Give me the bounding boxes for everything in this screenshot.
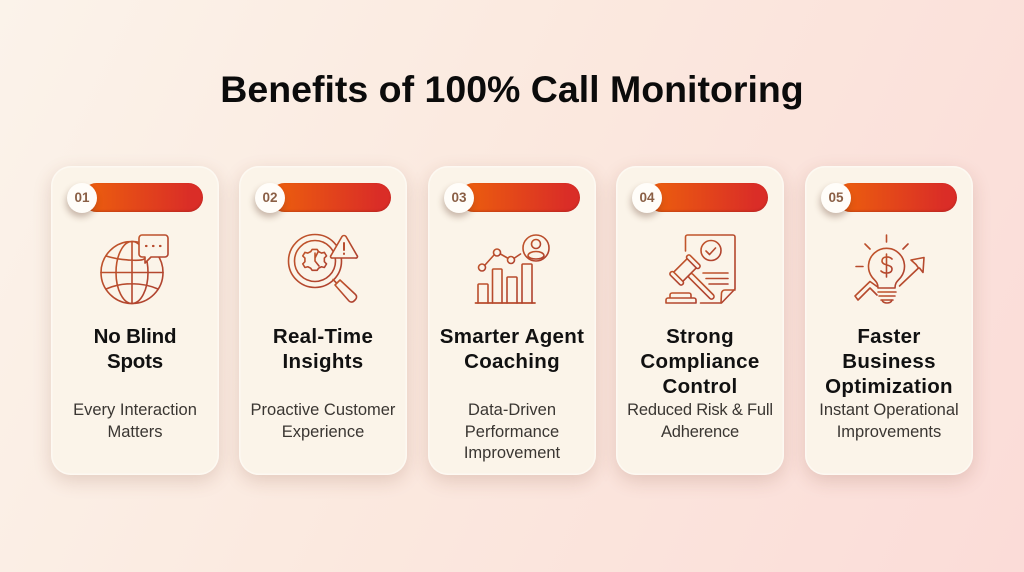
title: Benefits of 100% Call Monitoring [220,68,804,110]
card heading: No Blind [94,325,176,348]
card heading: Faster [857,325,921,348]
card heading: Compliance [640,350,760,373]
card heading: Spots [107,350,163,373]
panel: card 2 real-time insights [239,166,407,475]
icon: globe with chat bubble [100,234,169,304]
number badge 05 [821,183,851,213]
card heading [825,325,953,398]
card description [73,401,197,440]
card description: Adherence [661,422,739,440]
card description: Proactive Customer [251,401,395,419]
card description: Improvements [837,422,941,440]
card description: Matters [107,422,162,440]
card heading: Control [662,375,737,398]
card description: Every Interaction [73,401,197,419]
icon: gavel and document [665,234,736,304]
header bar 03 [459,183,580,212]
number badge 05: 05 [828,190,844,205]
icon: light bulb with dollar and arrow [854,234,925,304]
number badge 02 [255,183,285,213]
header bar 05 [836,183,957,212]
card description: Experience [282,422,364,440]
card heading [440,325,584,373]
card description [819,401,959,440]
header bar 02 [270,183,391,212]
panel: card 1 no blind spots [51,166,219,475]
card heading: Smarter Agent [440,325,584,348]
card description: Improvement [464,444,560,462]
card description [627,401,773,440]
card heading: Business [842,350,936,373]
icon: magnifier with gear and alert [288,234,358,303]
card description: Data-Driven [468,401,556,419]
panel: card 3 smarter agent coaching [428,166,596,475]
card description: Instant Operational [819,401,959,419]
icon: bar chart with trend and agent [474,234,550,304]
card heading: Strong [666,325,734,348]
panel: card 4 strong compliance control [616,166,784,475]
number badge 04: 04 [639,190,655,205]
number badge 03 [444,183,474,213]
card heading [640,325,760,398]
card description [464,401,560,462]
card heading: Optimization [825,375,953,398]
header bar 04 [647,183,768,212]
card heading: Coaching [464,350,560,373]
header bar 01 [82,183,203,212]
card description: Reduced Risk & Full [627,401,773,419]
number badge 01: 01 [74,190,90,205]
card heading: Real-Time [273,325,373,348]
card description [251,401,396,440]
card heading [94,325,176,373]
number badge 02: 02 [262,190,278,205]
number badge 01 [67,183,97,213]
card heading [273,325,373,373]
number badge 03: 03 [451,190,467,205]
card heading: Insights [282,350,364,373]
card description: Performance [465,422,559,440]
number badge 04 [632,183,662,213]
panel: card 5 faster business optimization [805,166,973,475]
